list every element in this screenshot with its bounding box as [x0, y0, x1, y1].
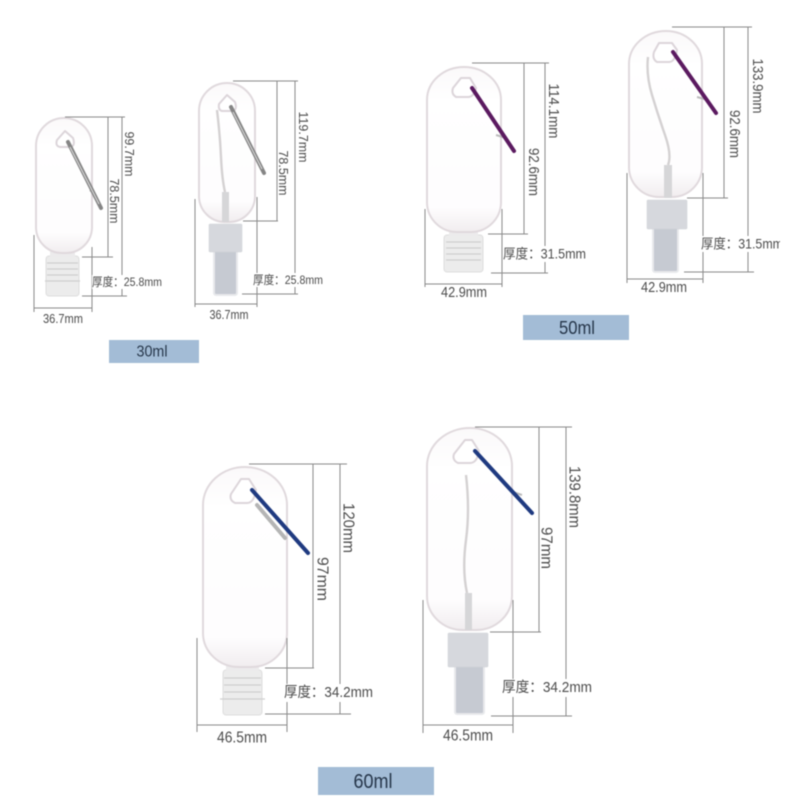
label: 50ml	[523, 315, 629, 340]
label: 30ml	[109, 340, 199, 363]
text: thickness 31.5mm: 厚度：31.5mm	[503, 246, 586, 262]
dimension lines: 60ml spray	[423, 427, 572, 733]
label: 60ml: 60ml	[354, 771, 392, 793]
text: 139.8mm: 139.8mm	[566, 466, 582, 528]
panel: 30ml flip-cap bottle	[34, 117, 163, 326]
dimension lines: 50ml flip-cap	[425, 63, 549, 287]
text: 133.9mm: 133.9mm	[749, 58, 765, 114]
text: thickness 25.8mm: 厚度：25.8mm	[253, 272, 323, 287]
text: thickness 31.5mm: 厚度：31.5mm	[701, 236, 783, 252]
text: 46.5mm: 46.5mm	[443, 728, 493, 744]
text: 119.7mm: 119.7mm	[296, 112, 310, 162]
icon: 50ml spray bottle with carabiner	[629, 31, 716, 272]
text: 36.7mm: 36.7mm	[43, 312, 83, 326]
text: 92.6mm: 92.6mm	[726, 110, 742, 158]
icon: 60ml flip-cap bottle with carabiner	[203, 467, 308, 715]
text: 97mm: 97mm	[538, 527, 554, 569]
text: thickness 25.8mm: 厚度：25.8mm	[92, 274, 162, 289]
text: thickness 34.2mm: 厚度：34.2mm	[284, 684, 373, 701]
text: 42.9mm: 42.9mm	[641, 280, 687, 296]
text: 114.1mm: 114.1mm	[545, 84, 561, 138]
icon: 30ml flip-cap bottle with carabiner	[36, 118, 101, 296]
label: 60ml	[318, 767, 434, 795]
dimension lines: 50ml spray	[627, 27, 754, 283]
icon: 30ml spray bottle with carabiner	[199, 83, 264, 295]
text: thickness 34.2mm: 厚度：34.2mm	[502, 679, 592, 696]
dimension lines: 30ml spray	[195, 81, 298, 307]
icon: 50ml flip-cap bottle with carabiner	[427, 67, 514, 272]
panel: 60ml spray bottle	[423, 427, 593, 744]
icon: 60ml spray bottle with carabiner	[427, 428, 532, 714]
text: 42.9mm: 42.9mm	[441, 285, 487, 301]
panel: 50ml spray bottle	[627, 27, 800, 296]
text: 78.5mm: 78.5mm	[276, 150, 290, 196]
panel: 60ml flip-cap bottle	[197, 464, 374, 746]
text: 92.6mm: 92.6mm	[525, 148, 541, 196]
panel: 50ml flip-cap bottle	[425, 63, 587, 301]
text: 78.5mm: 78.5mm	[107, 178, 121, 224]
text: 97mm: 97mm	[314, 557, 330, 601]
label: 50ml: 50ml	[559, 318, 595, 338]
text: 120mm: 120mm	[340, 503, 356, 553]
text: 99.7mm: 99.7mm	[122, 132, 136, 176]
dimension lines: 60ml flip-cap	[197, 464, 351, 732]
text: thickness 31.5mm	[701, 234, 800, 254]
text: 36.7mm: 36.7mm	[210, 308, 248, 322]
panel: 30ml spray bottle	[195, 81, 324, 322]
label: 30ml: 30ml	[136, 344, 168, 360]
text: 46.5mm: 46.5mm	[217, 730, 267, 746]
dimension lines: 30ml flip-cap	[34, 117, 127, 312]
